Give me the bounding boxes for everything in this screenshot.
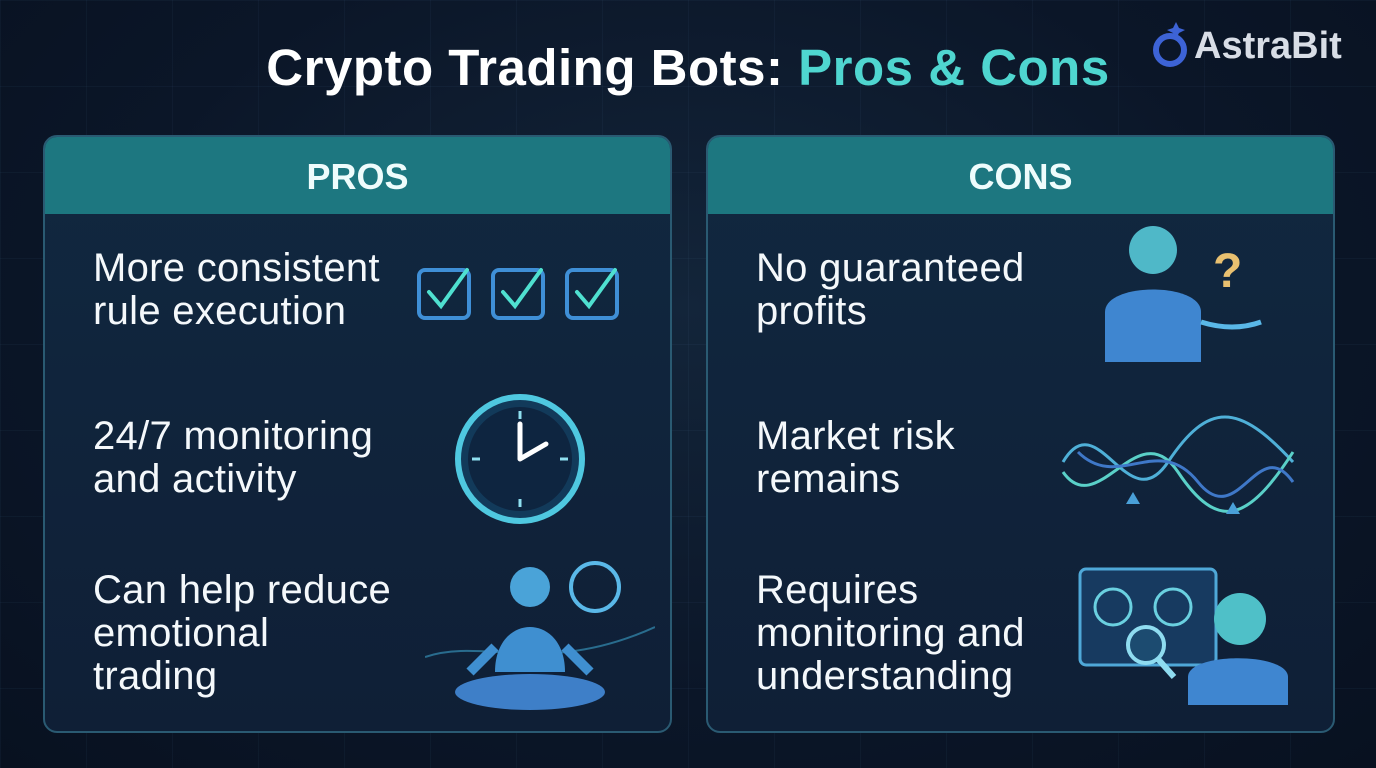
text: 24/7: 24/7 monitoring: [93, 414, 373, 458]
text: profits: No guaranteed: [756, 246, 1025, 290]
text: emotional: Can help reduce: [93, 568, 391, 612]
text: consistent: [93, 246, 380, 333]
text: emotional: trading: [93, 654, 217, 698]
text: profits: [756, 246, 1025, 333]
icon: person question: ?: [1213, 245, 1242, 298]
text: market risk: remains: [756, 457, 900, 501]
title: Crypto Trading Bots: Pros & Cons: [266, 39, 1110, 96]
text: market risk: Market risk: [756, 414, 955, 458]
text: requires monitoring: Requires: [756, 568, 918, 612]
text: requires monitoring: monitoring and: [756, 611, 1025, 655]
icon: clock: [455, 394, 585, 524]
icon: person question: [1105, 226, 1262, 362]
icon: checkboxes: [417, 268, 619, 320]
icon: dashboard person: [1078, 568, 1288, 705]
panel: pros: [43, 135, 672, 733]
icon: waves: [1062, 416, 1294, 514]
logo: AstraBit: [1194, 25, 1342, 67]
text: profits: profits: [756, 289, 867, 333]
icon: meditation: [425, 561, 655, 710]
text: emotional: emotional: [93, 611, 269, 655]
text: consistent: rule execution: [93, 289, 346, 333]
panel: cons: [706, 135, 1335, 733]
heading: cons: CONS: [968, 156, 1072, 197]
text: emotional: [93, 568, 391, 698]
text: requires monitoring: [756, 568, 1025, 698]
text: market risk: [756, 414, 955, 501]
text: consistent: More consistent: [93, 246, 380, 290]
heading: pros: PROS: [306, 156, 409, 197]
text: 24/7: and activity: [93, 457, 297, 501]
heading: pros: [45, 137, 670, 214]
text: 24/7: [93, 414, 373, 501]
text: requires monitoring: understanding: [756, 654, 1013, 698]
heading: cons: [708, 137, 1333, 214]
